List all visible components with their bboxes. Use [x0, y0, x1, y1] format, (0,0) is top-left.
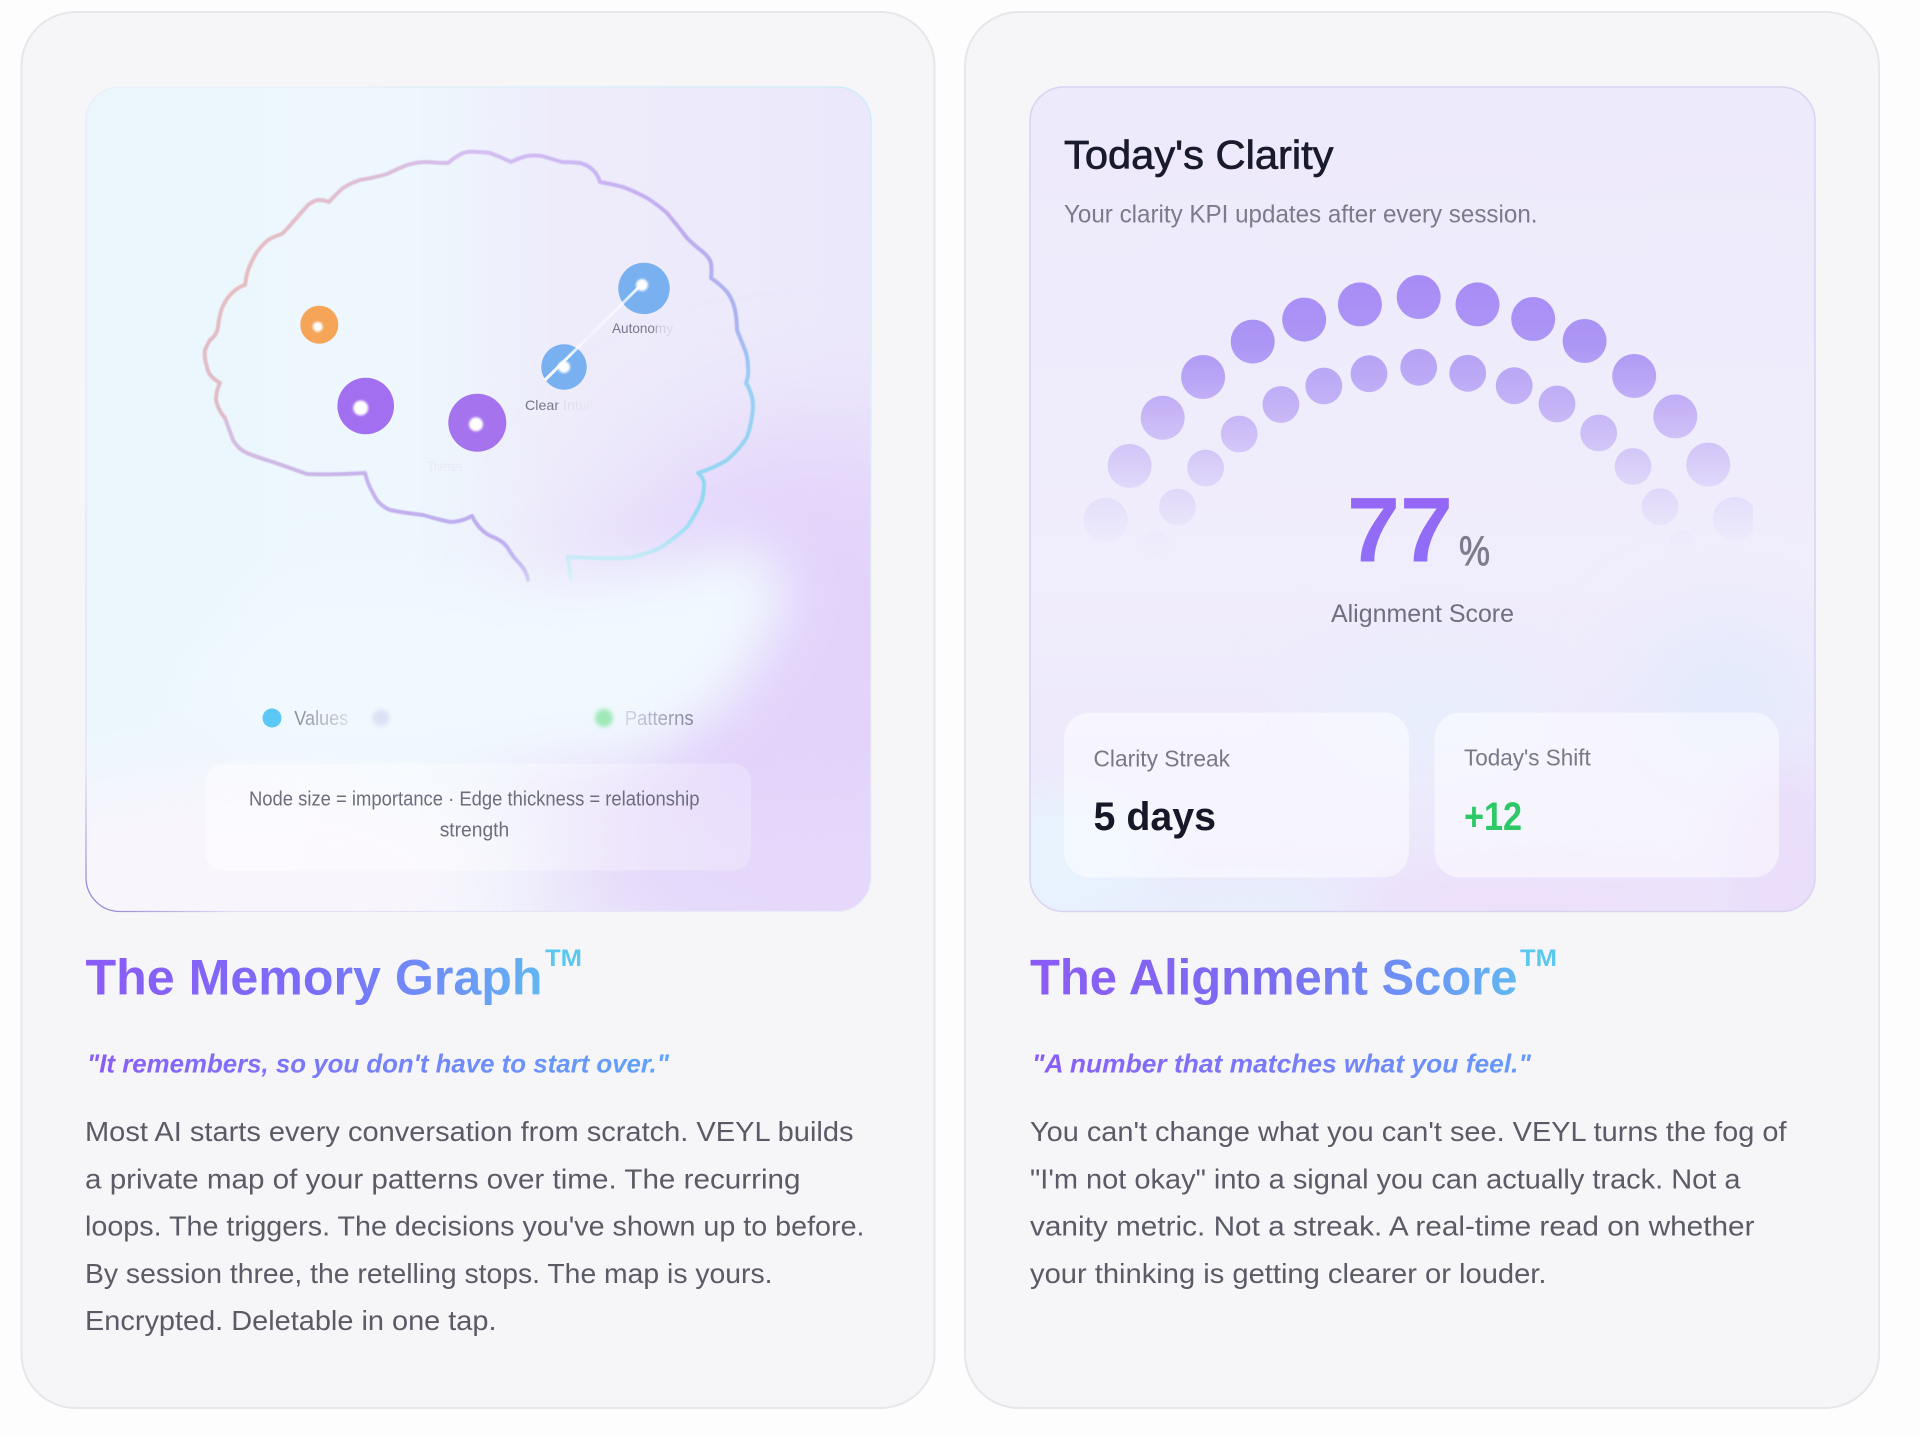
- stat card: clarity streak: 5 days: [1094, 795, 1216, 839]
- stat card: todays shift: +12: [1464, 795, 1522, 839]
- body text: vanity metric. Not a streak. A real-time read on whether: [1030, 1210, 1754, 1242]
- body text: Most AI starts every conversation from scratch. VEYL builds: [85, 1116, 854, 1147]
- card background: [22, 12, 934, 1408]
- outer dot arc: [1084, 275, 1757, 542]
- label: clear intuition: Clear Intuition: [525, 397, 613, 413]
- visual background: [87, 88, 870, 911]
- heading: the alignment score: TM: [1520, 945, 1557, 972]
- score value: %: [1459, 528, 1490, 575]
- legend dot: patterns: [595, 709, 613, 727]
- node: clear intuition: [541, 344, 587, 390]
- visual border: [1030, 87, 1815, 912]
- legend text: patterns: Patterns: [625, 708, 694, 730]
- body text: "I'm not okay" into a signal you can actually track. Not a: [1030, 1163, 1741, 1194]
- brain outline: [205, 152, 753, 580]
- node: autonomy: [618, 263, 670, 314]
- quote: "A number that matches what you feel.": [1032, 1048, 1532, 1078]
- node: purple one: [337, 378, 394, 434]
- body text: You can't change what you can't see. VEYL turns the fog of: [1030, 1116, 1787, 1147]
- legend: [262, 708, 694, 730]
- heading: the alignment score: The Alignment Score: [1030, 950, 1518, 1006]
- node: orange: [300, 306, 338, 344]
- panel: alignment score card: [965, 12, 1879, 1408]
- label: themes: Themes: [428, 458, 463, 474]
- visual background: [1031, 88, 1814, 911]
- heading: the memory graph: The Memory Graph: [86, 950, 542, 1006]
- visual: memory graph: [85, 86, 872, 912]
- heading: the memory graph: TM: [545, 945, 582, 972]
- body text: your thinking is getting clearer or louder.: [1030, 1258, 1546, 1289]
- edge between blue nodes: [545, 285, 641, 380]
- note text: strength: [440, 820, 509, 842]
- panel: memory graph card: [20, 11, 936, 1409]
- node: purple two: [448, 394, 506, 452]
- legend text: values: Values: [294, 708, 348, 730]
- card background: [965, 12, 1879, 1408]
- stat card: clarity streak: Clarity Streak: [1094, 745, 1230, 771]
- body text: By session three, the retelling stops. The map is yours.: [85, 1258, 772, 1289]
- visual border: [86, 87, 871, 912]
- stat card: todays shift: [1434, 712, 1779, 878]
- stat card: todays shift: Today's Shift: [1464, 744, 1591, 770]
- note text: Node size = importance · Edge thickness = relationship: [249, 789, 700, 811]
- score value: 77: [1347, 480, 1453, 582]
- stat card: clarity streak: [1064, 712, 1409, 878]
- legend dot: values: [262, 708, 282, 728]
- note box: [206, 764, 751, 870]
- label: autonomy: Autonomy: [612, 320, 673, 336]
- body text: a private map of your patterns over time. The recurring: [85, 1163, 800, 1194]
- score label: Alignment Score: [1331, 600, 1514, 628]
- fog overlay: [468, 522, 800, 768]
- body text: Encrypted. Deletable in one tap.: [85, 1305, 497, 1336]
- body text: loops. The triggers. The decisions you've shown up to before.: [85, 1210, 864, 1242]
- subheading: Your clarity KPI updates after every session.: [1064, 201, 1538, 229]
- quote: "It remembers, so you don't have to start over.": [87, 1048, 670, 1078]
- legend dot: faint: [372, 710, 390, 726]
- gauge: dotted arc: [1084, 275, 1753, 525]
- visual: todays clarity: [1029, 86, 1816, 912]
- heading: todays clarity: Today's Clarity: [1064, 134, 1334, 178]
- inner dot arc: [1159, 348, 1678, 525]
